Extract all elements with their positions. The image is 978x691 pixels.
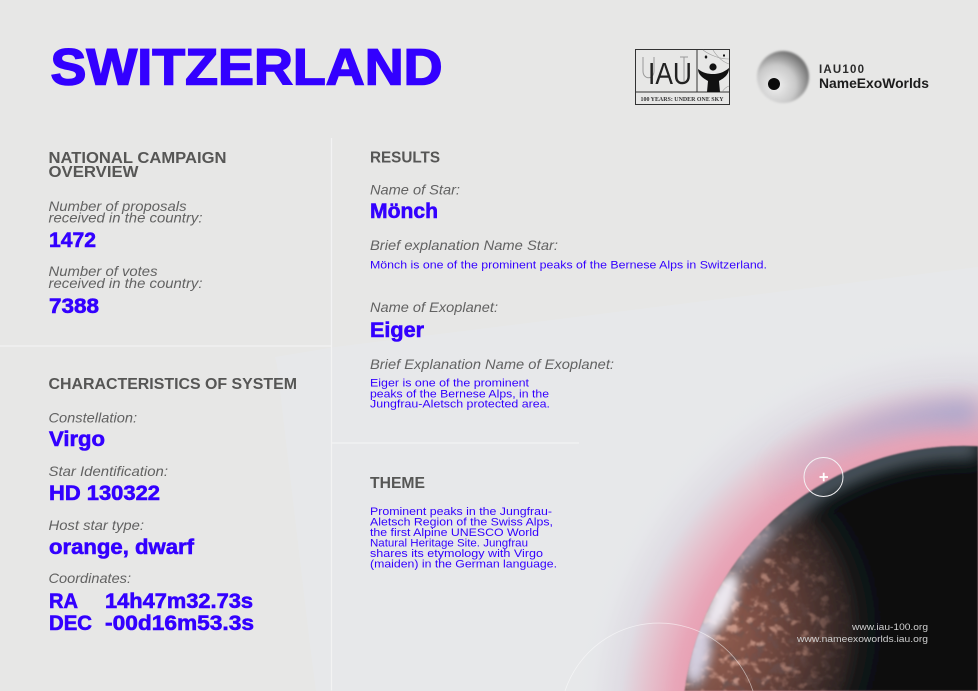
title: SWITZERLAND: [50, 39, 443, 96]
logo: IAU 100 years: [636, 50, 730, 104]
planet glow: [610, 370, 978, 691]
star id label: Star Identification:: [48, 463, 168, 479]
exoplanet explanation label: Brief Explanation Name of Exoplanet:: [370, 356, 614, 372]
coordinates values: [49, 590, 254, 635]
coordinates values: 14h47m32.73s: [105, 590, 253, 613]
website links: www.nameexoworlds.iau.org: [796, 634, 928, 645]
logo: NameExoWorlds: [757, 51, 929, 103]
votes label: Number of votes: [48, 263, 158, 279]
theme text: Prominent peaks in the Jungfrau-: [370, 506, 552, 518]
panel: characteristics of system: [48, 376, 297, 635]
proposals value: 1472: [49, 229, 96, 252]
theme text: Aletsch Region of the Swiss Alps,: [370, 517, 553, 529]
host star value: orange, dwarf: [49, 536, 195, 559]
planet: [680, 440, 978, 691]
theme text: shares its etymology with Virgo: [370, 548, 543, 560]
host star label: Host star type:: [48, 517, 144, 533]
theme text: (maiden) in the German language.: [370, 558, 557, 570]
proposals label: [48, 198, 203, 226]
star name label: Name of Star:: [370, 182, 460, 198]
panel: results: [370, 150, 767, 411]
votes label: [48, 263, 203, 291]
panel: national campaign overview: [48, 150, 227, 318]
logo letter outlines: [643, 57, 688, 81]
planet white haze: [681, 520, 778, 685]
exoplanet explanation: peaks of the Bernese Alps, in the: [370, 388, 549, 400]
background light diagonal panel: [275, 267, 978, 691]
votes label: received in the country:: [48, 275, 203, 291]
coordinates values: -00d16m53.3s: [105, 612, 254, 635]
star explanation: Mönch is one of the prominent peaks of the Bernese Alps in Switzerland.: [370, 260, 767, 272]
logo: NameExoWorlds: NameExoWorlds: [819, 76, 929, 91]
exoplanet explanation: Eiger is one of the prominent: [370, 378, 529, 390]
heading: THEME: [370, 475, 425, 492]
coordinates values: RA: [49, 590, 78, 613]
planet surface speckle: [685, 510, 846, 691]
logo figure: [698, 50, 729, 92]
planet lit hemisphere: [684, 499, 880, 691]
exoplanet explanation: [370, 378, 550, 411]
exoplanet explanation: Jungfrau-Aletsch protected area.: [370, 399, 550, 411]
star id value: HD 130322: [49, 482, 160, 505]
votes value: 7388: [49, 295, 99, 318]
coordinates values: DEC: [49, 612, 92, 635]
theme text: the first Alpine UNESCO World: [370, 527, 539, 539]
constellation value: Virgo: [49, 428, 105, 451]
star explanation label: Brief explanation Name Star:: [370, 237, 558, 253]
divider lines: [0, 138, 579, 690]
website links: [796, 622, 928, 645]
circle marker with plus: [804, 458, 843, 496]
theme text: [370, 506, 557, 570]
exoplanet name label: Name of Exoplanet:: [370, 299, 498, 315]
logo: NameExoWorlds: IAU100: [819, 64, 864, 76]
planet upper rim: [689, 449, 978, 691]
heading: [48, 150, 227, 181]
proposals label: Number of proposals: [48, 198, 186, 214]
coordinates label: Coordinates:: [48, 570, 131, 586]
proposals label: received in the country:: [48, 210, 203, 226]
exoplanet name: Eiger: [370, 319, 424, 342]
heading: CHARACTERISTICS OF SYSTEM: [48, 376, 297, 393]
bottom thin arc: [565, 623, 753, 691]
theme text: Natural Heritage Site. Jungfrau: [370, 537, 528, 549]
panel: theme: [370, 475, 557, 570]
logo letters: IAU: [648, 56, 692, 91]
logo caption: 100 YEARS: UNDER ONE SKY: [640, 96, 724, 103]
heading: NATIONAL CAMPAIGN: [48, 150, 227, 167]
constellation label: Constellation:: [48, 410, 137, 426]
heading: OVERVIEW: [48, 164, 139, 181]
heading: RESULTS: [370, 150, 440, 166]
website links: www.iau-100.org: [851, 622, 928, 633]
star name: Mönch: [370, 200, 438, 223]
